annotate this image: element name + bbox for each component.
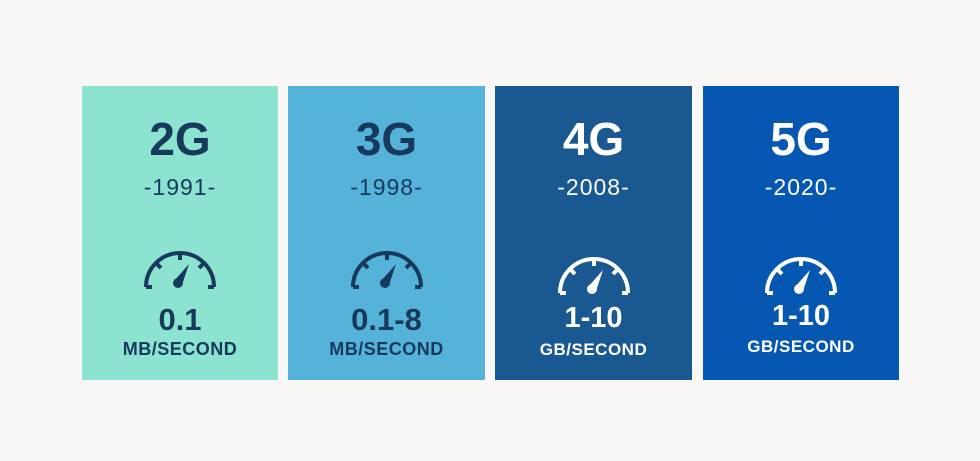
heading: 3G: 3G	[356, 113, 417, 165]
icon: gauge	[558, 257, 630, 295]
speed: 0.1: 0.1	[158, 302, 202, 337]
unit: MB/SECOND	[329, 339, 444, 359]
unit: MB/SECOND	[123, 339, 237, 359]
panel: 3G	[288, 86, 485, 380]
unit: GB/SECOND	[747, 337, 855, 356]
panel: 5G	[703, 86, 899, 380]
heading: 4G: 4G	[563, 113, 624, 165]
panel: 2G	[82, 86, 278, 380]
year: 2020: -2020-	[765, 174, 837, 200]
year: 1991: -1991-	[144, 174, 216, 200]
icon: gauge	[351, 251, 423, 289]
unit: GB/SECOND	[540, 340, 647, 359]
heading: 5G: 5G	[770, 113, 832, 165]
year: 1998: -1998-	[350, 174, 423, 200]
year: 2008: -2008-	[557, 174, 630, 200]
heading: 2G: 2G	[149, 113, 211, 165]
icon: gauge	[144, 251, 216, 289]
speed: 1-10: 1-10	[772, 300, 830, 332]
speed: 0.1-8: 0.1-8	[351, 302, 422, 337]
speed: 1-10: 1-10	[564, 302, 623, 334]
icon: gauge	[765, 257, 837, 295]
panel: 4G	[495, 86, 692, 380]
